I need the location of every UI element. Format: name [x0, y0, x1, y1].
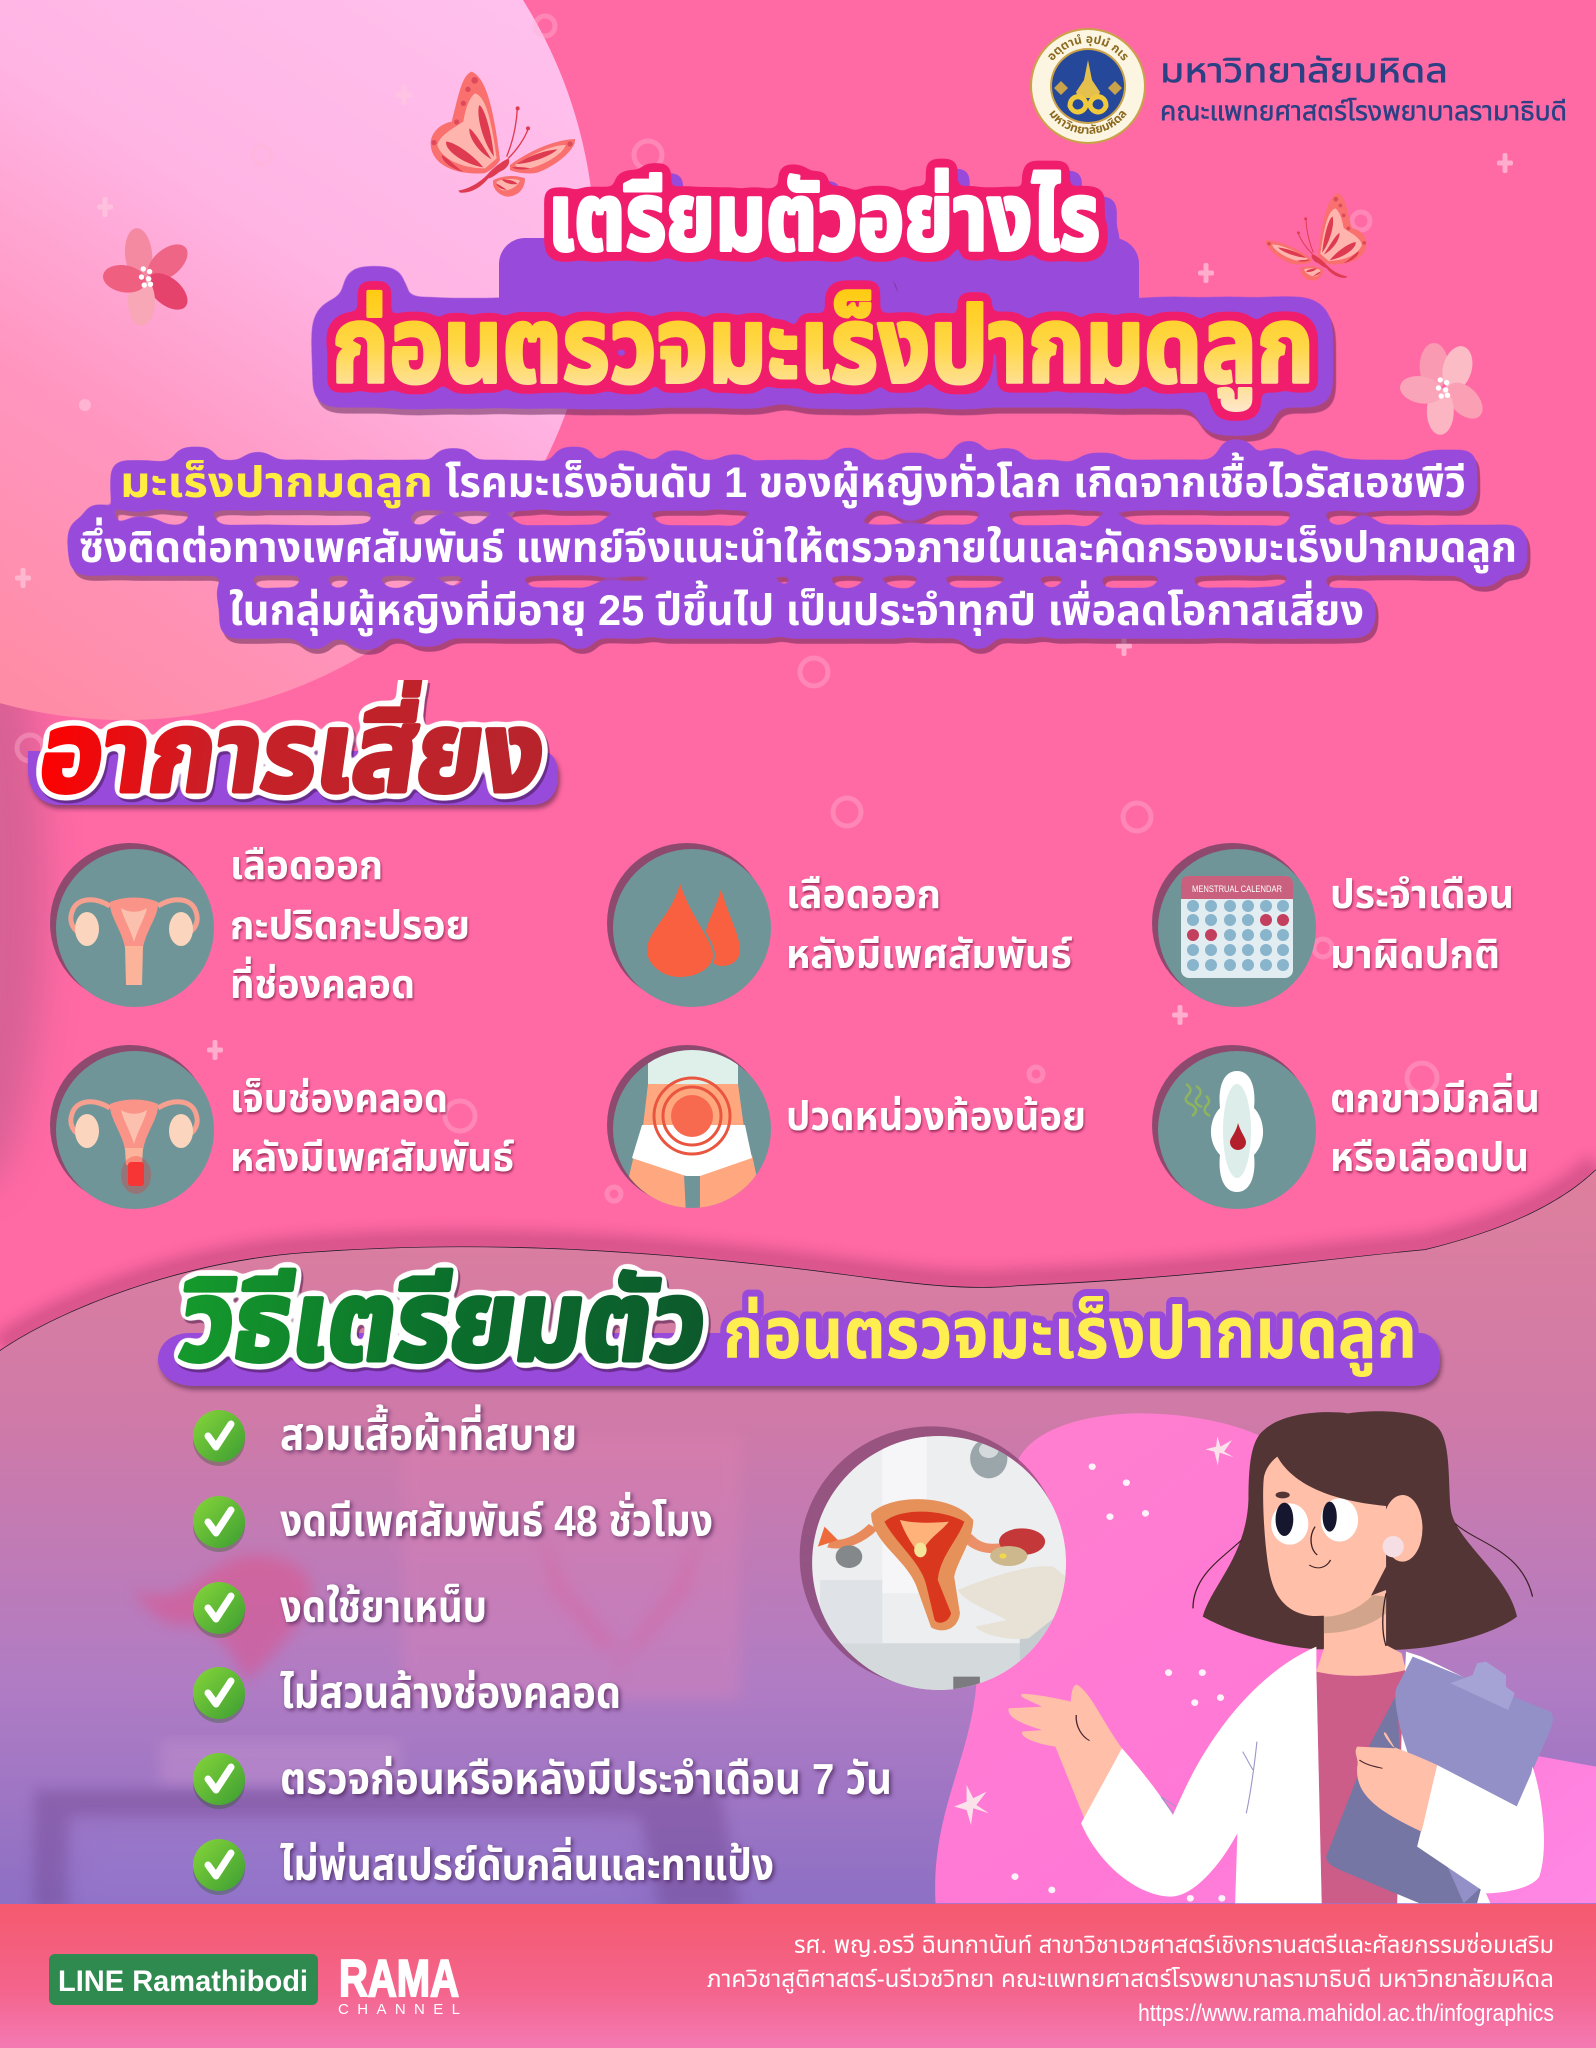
icon: flower right: [1398, 343, 1489, 435]
item 4: [193, 1667, 621, 1723]
credit text: ภาควิชาสูติศาสตร์-นรีเวชวิทยา คณะแพทยศาสตร์โรงพยาบาลรามาธิบดี มหาวิทยาลัยมหิดล: [707, 1966, 1554, 1994]
symptom text: ตกขาวมีกลิ่น: [1330, 1072, 1540, 1121]
footer band: [0, 1904, 1596, 2048]
symptom text: [1330, 1072, 1540, 1180]
icon: pelvis with pain rings: [607, 1040, 771, 1215]
item 2: [193, 1492, 713, 1552]
left arm and hand: [1009, 1685, 1122, 1818]
RAMA channel logo: [338, 1950, 460, 2018]
symptom text: มาผิดปกติ: [1330, 933, 1500, 977]
logo wordmark: คณะแพทยศาสตร์โรงพยาบาลรามาธิบดี: [1160, 96, 1567, 126]
heading: how to prepare: [158, 1258, 1440, 1386]
logo wordmark: มหาวิทยาลัยมหิดล: [1160, 52, 1448, 90]
decorative rings and sparkles: [17, 16, 1437, 1201]
decorative top-left pale circle: [0, 0, 595, 720]
symptom text: ประจำเดือน: [1330, 873, 1514, 917]
symptom text: [230, 844, 470, 1007]
credit text: รศ. พญ.อรวี ฉินทกานันท์ สาขาวิชาเวชศาสตร์เชิงกรานสตรีและศัลยกรรมซ่อมเสริม: [794, 1931, 1554, 1959]
right sleeve and hand: [1417, 1765, 1544, 1891]
title line 1: เตรียมตัวอย่างไร: [548, 165, 1100, 270]
icon: sanitary pad: [1152, 1045, 1316, 1209]
symptom 3: irregular period: [1152, 843, 1514, 1007]
symptom text: หลังมีเพศสัมพันธ์: [230, 1136, 515, 1180]
symptom text: [230, 1076, 515, 1180]
item 3: [193, 1582, 487, 1638]
purple connector behind title lines: [499, 238, 1139, 338]
illustration: pink blob and doctor: [935, 1411, 1596, 1903]
title line 2: ก่อนตรวจมะเร็งปากมดลูก: [332, 287, 1314, 410]
icon: flower left: [101, 227, 194, 326]
heading: risk symptoms: อาการเสี่ยง: [33, 674, 555, 815]
logo: Mahidol University seal: มหาวิทยาลัยมหิดล: [1049, 110, 1127, 134]
logo: Mahidol University seal: อตฺตานํ อุปมํ กเร: [1048, 34, 1128, 60]
heading: how to prepare: วิธีเตรียมตัว: [172, 1258, 715, 1384]
item 3: งดใช้ยาเหน็บ: [280, 1583, 487, 1632]
item 4: ไม่สวนล้างช่องคลอด: [280, 1669, 621, 1718]
heading: how to prepare: ก่อนตรวจมะเร็งปากมดลูก: [723, 1294, 1417, 1377]
intro paragraph: [79, 452, 1517, 636]
clipboard: [1326, 1693, 1482, 1903]
doctor face: [1263, 1457, 1386, 1616]
intro paragraph: ในกลุ่มผู้หญิงที่มีอายุ 25 ปีขึ้นไป เป็นประจำทุกปี เพื่อลดโอกาสเสี่ยง: [229, 580, 1364, 636]
uterus body: [871, 1499, 973, 1630]
RAMA channel logo: CHANNEL: [338, 2001, 460, 2018]
symptom text: หรือเลือดปน: [1330, 1136, 1529, 1180]
icon: uterus in circle: [50, 843, 214, 1007]
icon: menstrual calendar: MENSTRUAL CALENDAR: [1192, 884, 1282, 894]
symptom text: ปวดหน่วงท้องน้อย: [786, 1094, 1086, 1139]
icon: butterfly right: [1265, 193, 1367, 281]
intro paragraph: มะเร็งปากมดลูก: [120, 459, 433, 508]
checklist: [193, 1404, 892, 1895]
symptom 1: spotting: [50, 843, 470, 1007]
logo wordmark: [1160, 52, 1567, 126]
icon: uterus with red glow: [50, 1045, 214, 1209]
photo: doctor holding uterus model: [800, 1426, 1078, 1697]
icon: blood drops: [607, 843, 771, 1007]
symptom text: เลือดออก: [786, 873, 941, 917]
credit text: [707, 1931, 1554, 2027]
LINE badge: LINE Ramathibodi: [58, 1965, 308, 1998]
item 1: [193, 1404, 577, 1466]
symptom 5: lower abdominal pain: [607, 1040, 1086, 1215]
LINE badge: [49, 1954, 318, 2005]
symptom 6: odorous discharge: [1152, 1045, 1540, 1209]
symptom text: [786, 873, 1073, 977]
lab coat: [1081, 1647, 1322, 1903]
RAMA channel logo: RAMA: [339, 1950, 459, 2008]
symptom text: ที่ช่องคลอด: [230, 956, 415, 1007]
symptom text: หลังมีเพศสัมพันธ์: [786, 933, 1073, 977]
symptom text: เจ็บช่องคลอด: [230, 1076, 448, 1121]
item 6: ไม่พ่นสเปรย์ดับกลิ่นและทาแป้ง: [280, 1837, 774, 1890]
doctor hair: [1203, 1411, 1517, 1650]
doctor neck: [1316, 1590, 1406, 1676]
photo backdrop section with wave edge: [0, 1160, 1596, 1910]
item 1: สวมเสื้อผ้าที่สบาย: [280, 1404, 577, 1460]
intro paragraph: โรคมะเร็งอันดับ 1 ของผู้หญิงทั่วโลก เกิดจากเชื้อไวรัสเอชพีวี: [445, 452, 1466, 508]
small star flowers: [1205, 1437, 1234, 1466]
icon: butterfly left: [431, 72, 575, 197]
title: [332, 165, 1314, 410]
logo: Mahidol University seal: [1030, 28, 1146, 144]
item 2: งดมีเพศสัมพันธ์ 48 ชั่วโมง: [280, 1492, 713, 1546]
intro paragraph: ซึ่งติดต่อทางเพศสัมพันธ์ แพทย์จึงแนะนำให้ตรวจภายในและคัดกรองมะเร็งปากมดลูก: [79, 517, 1517, 573]
right tube and ovary: [967, 1534, 1001, 1554]
icon: menstrual calendar: [1152, 843, 1316, 1007]
pink blob: [935, 1413, 1596, 1903]
item 6: [193, 1837, 774, 1895]
symptom text: [1330, 873, 1514, 977]
item 5: ตรวจก่อนหรือหลังมีประจำเดือน 7 วัน: [280, 1755, 892, 1804]
gloved hand: [958, 1566, 1066, 1639]
symptom 2: bleeding after intercourse: [607, 843, 1073, 1007]
left tube and ovary: [829, 1527, 873, 1544]
symptom 4: vaginal pain: [50, 1045, 515, 1209]
doctor shirt: [1316, 1670, 1406, 1903]
symptom text: กะปริดกะปรอย: [230, 904, 470, 948]
credit text: https://www.rama.mahidol.ac.th/infographics: [1138, 2000, 1554, 2027]
symptom text: เลือดออก: [230, 844, 383, 888]
